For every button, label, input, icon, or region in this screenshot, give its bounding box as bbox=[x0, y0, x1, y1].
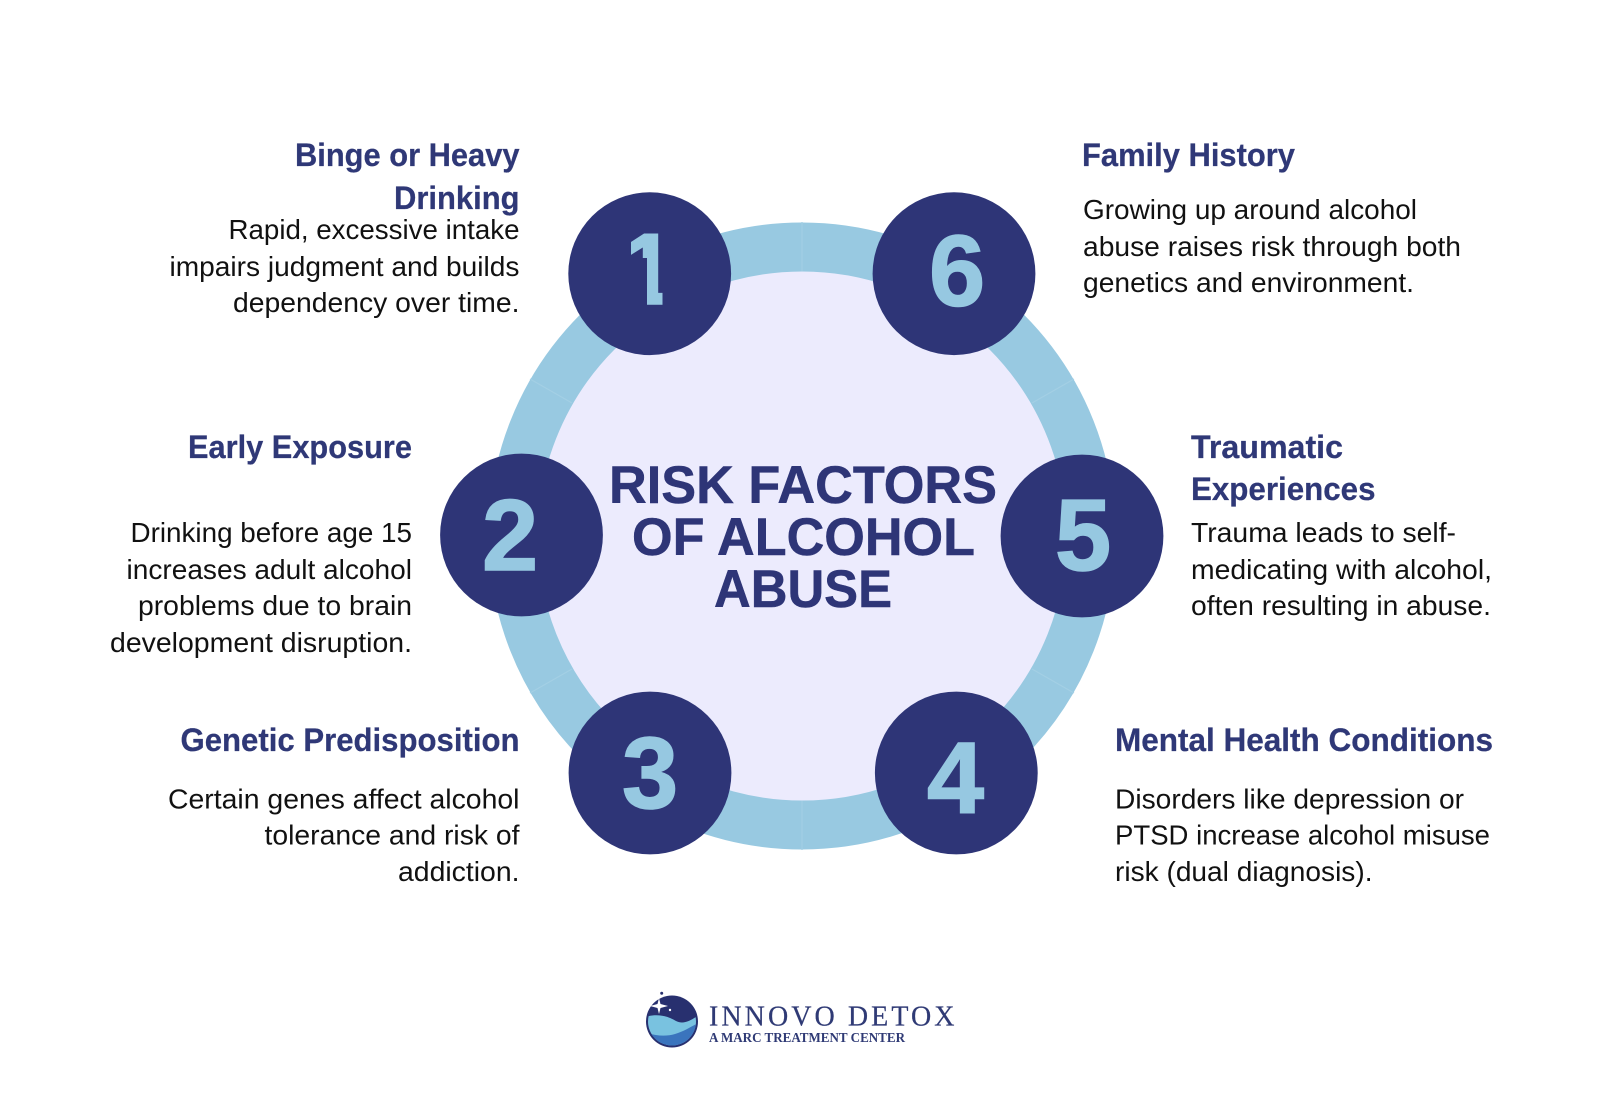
factor 4: mental health conditions: Disorders like depression or bbox=[1115, 784, 1464, 814]
center disc bbox=[532, 266, 1072, 806]
number badge 4 bbox=[875, 692, 1038, 854]
title: ABUSE bbox=[714, 560, 892, 619]
factor 1: binge or heavy drinking bbox=[170, 137, 520, 318]
outer ring bbox=[513, 247, 1091, 825]
factor 1: binge or heavy drinking: Binge or Heavy bbox=[295, 137, 520, 173]
factor 1: binge or heavy drinking: Drinking bbox=[394, 180, 520, 216]
factor 5: traumatic experiences: Trauma leads to self- bbox=[1191, 517, 1456, 548]
factor 6: family history: genetics and environment. bbox=[1083, 267, 1414, 298]
factor 3: genetic predisposition: tolerance and risk of bbox=[264, 820, 520, 850]
number badge 5 bbox=[1001, 455, 1163, 617]
number badge 1 bbox=[568, 192, 731, 355]
number badge 2 bbox=[440, 454, 603, 616]
factor 6: family history: Growing up around alcohol bbox=[1083, 194, 1417, 225]
factor 5: traumatic experiences bbox=[1191, 429, 1492, 621]
factor 4: mental health conditions: Mental Health Conditions bbox=[1115, 722, 1493, 758]
factor 1: binge or heavy drinking: dependency over time. bbox=[233, 287, 520, 318]
ring diagram bbox=[513, 222, 1091, 850]
factor 4: mental health conditions: risk (dual diagnosis). bbox=[1115, 856, 1372, 887]
factor 6: family history bbox=[1082, 137, 1461, 298]
logo wordmark: INNOVO DETOX bbox=[709, 1002, 954, 1032]
factor 2: early exposure: increases adult alcohol bbox=[126, 554, 412, 585]
factor 1: binge or heavy drinking: impairs judgment and builds bbox=[170, 251, 520, 282]
title bbox=[609, 456, 997, 619]
title: OF ALCOHOL bbox=[632, 508, 975, 567]
number badge 3 bbox=[569, 692, 731, 854]
number badge 4: 4 bbox=[927, 722, 984, 834]
factor 6: family history: Family History bbox=[1082, 137, 1295, 173]
factor 1: binge or heavy drinking: Rapid, excessive intake bbox=[228, 214, 520, 245]
factor 6: family history: abuse raises risk through both bbox=[1083, 231, 1461, 262]
factor 5: traumatic experiences: Traumatic bbox=[1191, 429, 1343, 465]
title: RISK FACTORS bbox=[609, 456, 997, 515]
logo: Innovo Detox bbox=[646, 992, 954, 1048]
factor 2: early exposure: Drinking before age 15 bbox=[130, 517, 412, 548]
factor 5: traumatic experiences: Experiences bbox=[1191, 471, 1376, 507]
number badge 6 bbox=[873, 192, 1035, 355]
factor 2: early exposure: Early Exposure bbox=[188, 429, 412, 465]
factor 4: mental health conditions: PTSD increase alcohol misuse bbox=[1115, 820, 1490, 850]
factor 2: early exposure: problems due to brain bbox=[138, 590, 412, 621]
number badge 2: 2 bbox=[482, 480, 538, 592]
number badge 3: 3 bbox=[622, 718, 678, 830]
factor 4: mental health conditions bbox=[1115, 722, 1493, 887]
factor 5: traumatic experiences: often resulting in abuse. bbox=[1191, 590, 1491, 621]
number badge 6: 6 bbox=[929, 216, 985, 328]
factor 3: genetic predisposition: addiction. bbox=[398, 856, 520, 887]
number badge 1: 1 bbox=[620, 214, 676, 326]
factor 2: early exposure bbox=[110, 429, 412, 658]
logo tagline: A MARC TREATMENT CENTER bbox=[709, 1030, 905, 1045]
factor 5: traumatic experiences: medicating with alcohol, bbox=[1191, 554, 1492, 585]
number badge 5: 5 bbox=[1055, 480, 1111, 592]
factor 3: genetic predisposition: Certain genes affect alcohol bbox=[168, 784, 520, 814]
factor 3: genetic predisposition: Genetic Predisposition bbox=[180, 722, 520, 758]
icon: globe with star and waves bbox=[646, 992, 698, 1048]
factor 3: genetic predisposition bbox=[168, 722, 520, 887]
factor 2: early exposure: development disruption. bbox=[110, 627, 412, 658]
